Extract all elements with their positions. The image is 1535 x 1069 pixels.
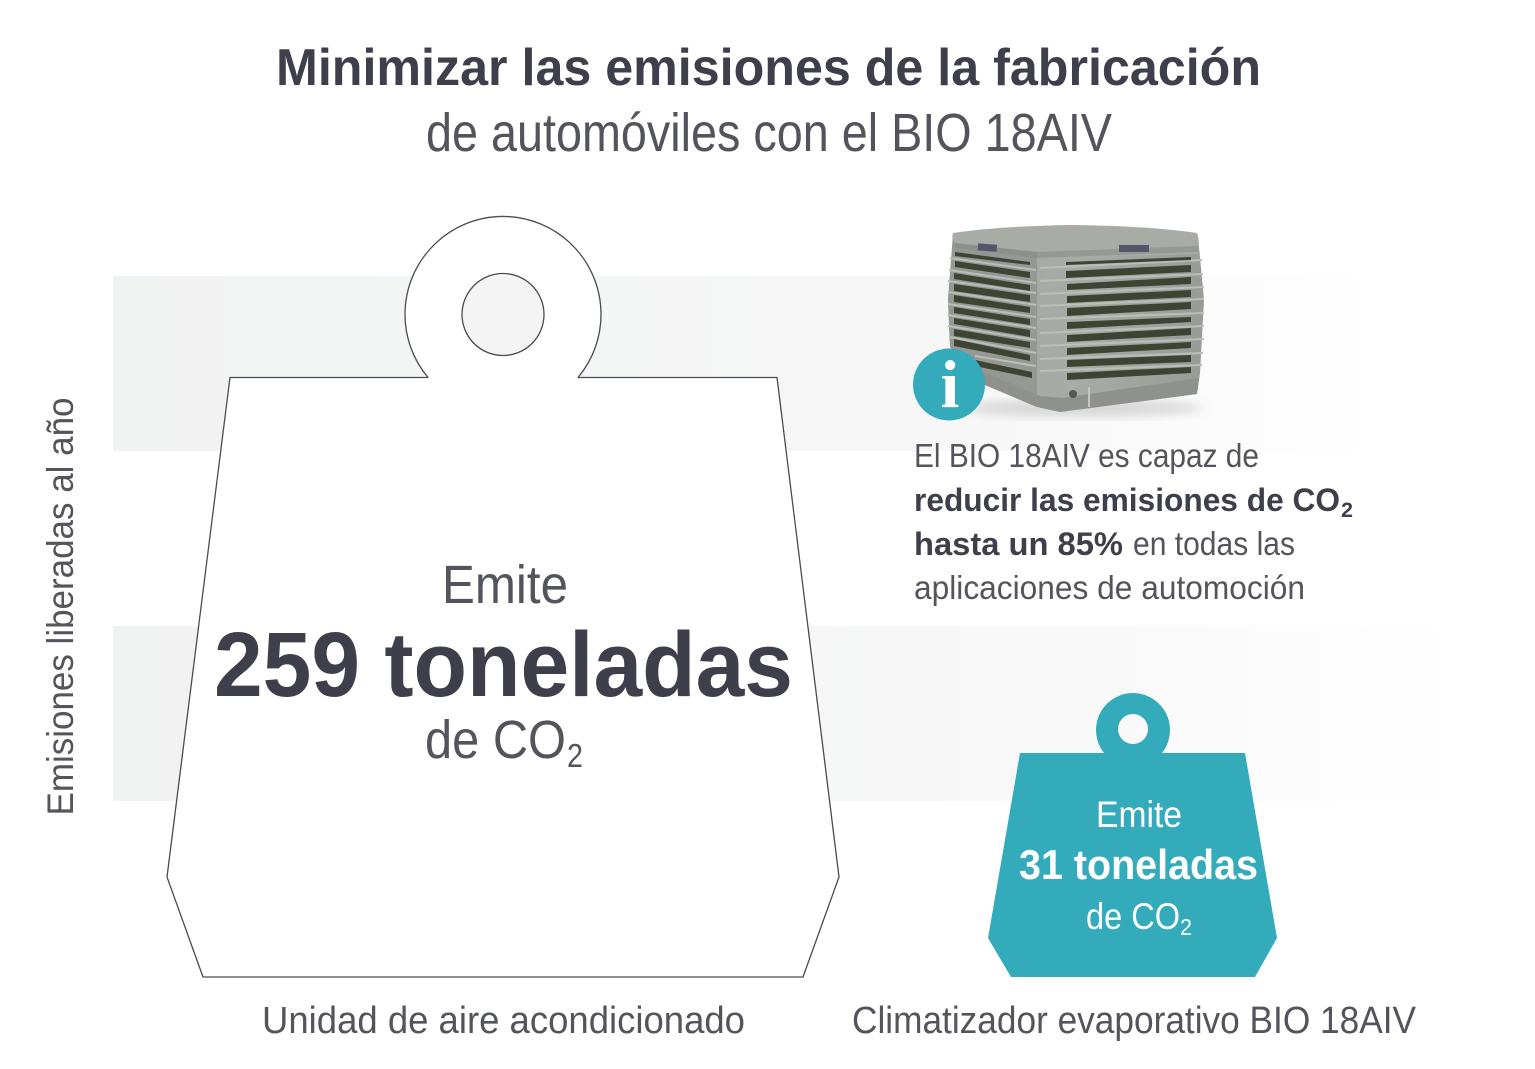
y-axis label: Emisiones liberadas al año (40, 398, 81, 816)
cooler drain fitting (1069, 387, 1090, 407)
cooler lid (952, 225, 1199, 258)
cooler logo plates (978, 243, 1149, 252)
background band: lower emission level (113, 626, 1460, 801)
evaporative cooler product illustration (948, 225, 1204, 417)
title: Minimizar las emisiones de la fabricación (276, 39, 1261, 97)
large weight text: 259 toneladas (214, 614, 793, 716)
large weight text (214, 555, 793, 774)
small weight text: de CO (1086, 896, 1180, 937)
cooler ridges (948, 258, 1204, 371)
large weight text: de CO (425, 710, 566, 770)
caption: air conditioning unit: Unidad de aire acondicionado (262, 1000, 745, 1042)
description text: en todas las (1133, 525, 1295, 562)
description text: 2 (1341, 499, 1353, 522)
large weight: air conditioning unit (167, 216, 839, 977)
cooler body (948, 233, 1204, 412)
small weight text: Emite (1096, 794, 1182, 835)
icon: information (913, 346, 985, 422)
description text: reducir las emisiones de CO (914, 482, 1340, 518)
background band: upper emission level (113, 276, 1375, 451)
cooler left louvres (954, 252, 1032, 378)
title (276, 39, 1261, 163)
caption: evaporative cooler: Climatizador evaporativo BIO 18AIV (852, 1000, 1417, 1042)
description text: hasta un 85% (914, 526, 1123, 562)
description text: aplicaciones de automoción (914, 569, 1305, 606)
description text (914, 437, 1353, 606)
small weight text (1019, 794, 1258, 940)
title: de automóviles con el BIO 18AIV (426, 103, 1112, 163)
icon: information: i (941, 346, 959, 422)
cooler left shade (948, 236, 1037, 407)
small weight text: 2 (1180, 914, 1192, 940)
cooler right louvres (1066, 257, 1191, 380)
large weight text: Emite (442, 555, 568, 615)
cooler base (983, 372, 1199, 412)
description text: El BIO 18AIV es capaz de (914, 437, 1259, 474)
large weight text: 2 (567, 737, 583, 774)
small weight: BIO 18AIV (988, 693, 1277, 977)
small weight text: 31 toneladas (1019, 841, 1258, 888)
